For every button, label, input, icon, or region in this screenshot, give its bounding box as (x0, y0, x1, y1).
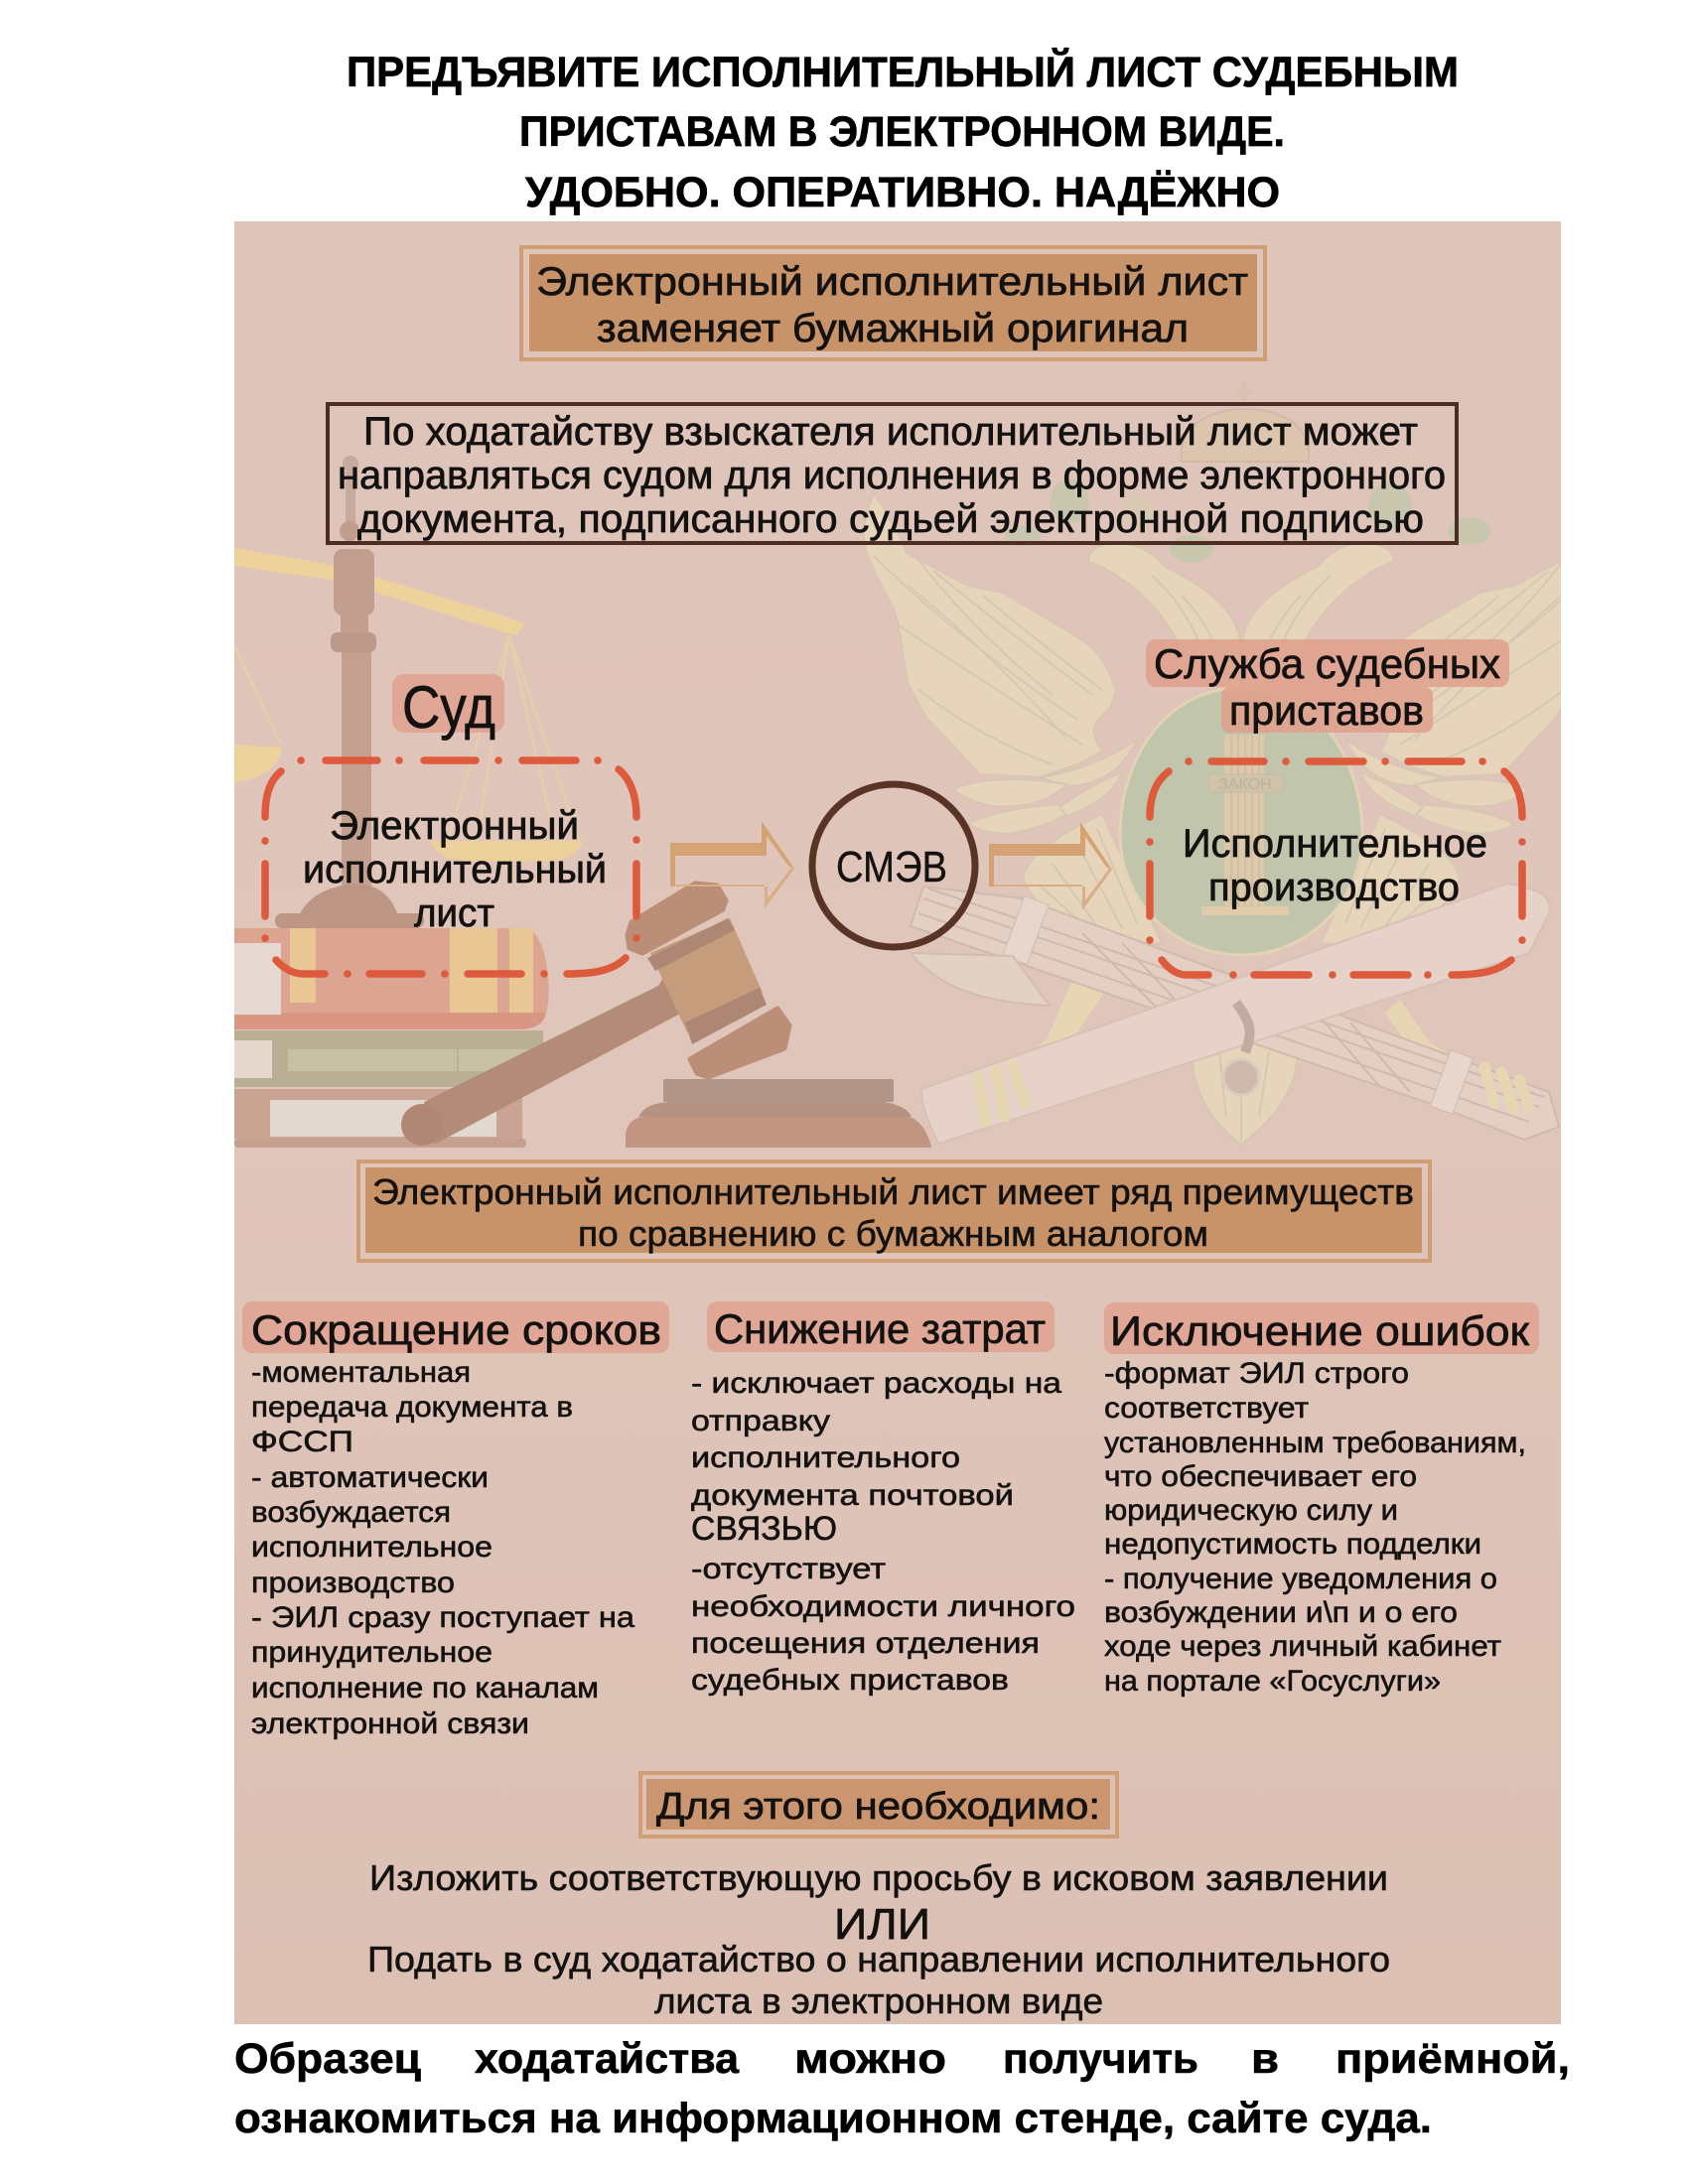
dashed box: electronic writ: Электронный (330, 804, 579, 848)
column: exclusion of errors: -формат ЭИЛ строго (1104, 1357, 1409, 1390)
text block: how to request: ИЛИ (834, 1900, 930, 1949)
arrow: SMEV to bailiff service (989, 822, 1112, 910)
illustration: eagle emblem: ЗАКОН (1218, 776, 1272, 793)
column: reduced terms: электронной связи (251, 1707, 529, 1740)
column: reduced costs: -отсутствует (691, 1553, 886, 1585)
text block: how to request: листа в электронном виде (654, 1980, 1103, 2021)
banner: advantages (358, 1161, 1430, 1261)
column: reduced terms: производство (251, 1567, 455, 1599)
text box: petition of the claimant: По ходатайству взыскателя исполнительный лист может (363, 410, 1418, 454)
dashed box: electronic writ: лист (414, 891, 494, 935)
footer note: получить (1003, 2035, 1198, 2083)
right half of eagle (1243, 545, 1561, 943)
text box: petition of the claimant: документа, подписанного судьей электронной подписью (357, 497, 1424, 541)
label: bailiff service: приставов (1229, 687, 1424, 734)
column: exclusion of errors: Исключение ошибок (1110, 1307, 1530, 1354)
column: exclusion of errors: возбуждении и\п и о его (1104, 1596, 1458, 1629)
column: reduced terms: - ЭИЛ сразу поступает на (251, 1601, 634, 1634)
illustration: gavel (401, 884, 931, 1148)
footer note: ходатайства (475, 2035, 740, 2083)
illustration: scales of justice (234, 456, 583, 928)
column: exclusion of errors: юридическую силу и (1104, 1494, 1398, 1527)
label: bailiff service (1146, 639, 1509, 734)
crowns and orbs (1236, 382, 1252, 407)
text box: petition of the claimant: направляться судом для исполнения в форме электронного (338, 454, 1446, 497)
banner: advantages: по сравнению с бумажным аналогом (578, 1213, 1208, 1254)
column: exclusion of errors: установленным требованиям, (1104, 1427, 1526, 1459)
column (1224, 735, 1264, 908)
column: reduced costs: СВЯЗЬЮ (691, 1510, 837, 1548)
ribbon and medal (1236, 1003, 1250, 1052)
illustration: eagle emblem (864, 382, 1618, 1145)
column: exclusion of errors: недопустимость подделки (1104, 1528, 1481, 1561)
column: reduced terms: передача документа в (251, 1391, 573, 1424)
column: reduced costs: документа почтовой (691, 1479, 1014, 1512)
text box: petition of the claimant (328, 404, 1457, 543)
banner: replaces paper original: Электронный исполнительный лист (536, 260, 1248, 304)
title: ПРИСТАВАМ В ЭЛЕКТРОННОМ ВИДЕ. (519, 108, 1285, 156)
left half of eagle (864, 493, 1241, 948)
illustration: stack of books (234, 928, 549, 1148)
fasces (911, 887, 1559, 1140)
column: reduced terms (242, 1301, 669, 1740)
column: reduced costs (691, 1301, 1075, 1697)
column: reduced costs: отправку (691, 1405, 830, 1437)
label: court: Суд (402, 674, 495, 741)
shield (1120, 688, 1362, 955)
circle: SMEV (812, 784, 975, 947)
title (347, 48, 1459, 216)
axe blade (911, 953, 1050, 1006)
column: reduced terms: возбуждается (251, 1496, 451, 1529)
dashed box: enforcement proceedings: производство (1208, 866, 1460, 909)
column: exclusion of errors: соответствует (1104, 1392, 1309, 1425)
column: reduced costs: Снижение затрат (714, 1305, 1046, 1352)
text block: how to request (367, 1857, 1390, 2021)
dashed box: enforcement proceedings (1150, 761, 1522, 975)
column: reduced costs: необходимости личного (691, 1590, 1075, 1623)
banner: what is required: Для этого необходимо: (656, 1786, 1100, 1828)
column: exclusion of errors (1104, 1302, 1539, 1698)
claws (978, 1064, 1529, 1122)
title: ПРЕДЪЯВИТЕ ИСПОЛНИТЕЛЬНЫЙ ЛИСТ СУДЕБНЫМ (347, 48, 1459, 96)
banner: what is required (640, 1773, 1117, 1837)
column: reduced costs: судебных приставов (691, 1664, 1009, 1697)
banner: advantages: Электронный исполнительный лист имеет ряд преимуществ (372, 1171, 1414, 1212)
tail and medal (1194, 1044, 1297, 1144)
column: reduced costs: - исключает расходы на (691, 1367, 1061, 1400)
legs (1039, 983, 1104, 1046)
column: reduced terms: -моментальная (251, 1356, 471, 1389)
column: exclusion of errors: ходе через личный кабинет (1104, 1630, 1501, 1663)
dashed box: electronic writ (265, 760, 636, 974)
dashed box: electronic writ: исполнительный (303, 848, 607, 891)
text block: how to request: Изложить соответствующую просьбу в исковом заявлении (369, 1857, 1388, 1898)
column: exclusion of errors: - получение уведомления о (1104, 1563, 1497, 1595)
arrow: court to SMEV (670, 821, 794, 908)
footer note: Образец (234, 2035, 422, 2083)
column: exclusion of errors: на портале «Госуслуги» (1104, 1665, 1441, 1698)
footer note: в (1251, 2035, 1279, 2083)
column: reduced terms: исполнительное (251, 1531, 492, 1564)
column: exclusion of errors: что обеспечивает его (1104, 1460, 1417, 1493)
column: reduced costs: исполнительного (691, 1441, 960, 1474)
banner: replaces paper original (521, 247, 1265, 359)
label: bailiff service: Служба судебных (1154, 640, 1500, 687)
column: reduced terms: - автоматически (251, 1461, 489, 1494)
sword (921, 884, 1550, 1144)
column: reduced costs: посещения отделения (691, 1627, 1040, 1660)
text block: how to request: Подать в суд ходатайство о направлении исполнительного (367, 1939, 1390, 1979)
footer note (234, 2035, 1570, 2142)
circle: SMEV: СМЭВ (836, 843, 947, 891)
column: reduced terms: принудительное (251, 1636, 492, 1669)
column: reduced terms: исполнение по каналам (251, 1672, 599, 1705)
column: reduced terms: Сокращение сроков (251, 1306, 661, 1353)
panel: background (234, 221, 1561, 2024)
dashed box: enforcement proceedings: Исполнительное (1183, 822, 1487, 866)
footer note: можно (794, 2035, 946, 2083)
column: reduced terms: ФССП (251, 1426, 353, 1458)
footer note: приёмной, (1336, 2035, 1570, 2083)
title: УДОБНО. ОПЕРАТИВНО. НАДЁЖНО (525, 169, 1280, 216)
banner: replaces paper original: заменяет бумажный оригинал (597, 307, 1189, 350)
footer note: ознакомиться на информационном стенде, сайте суда. (234, 2095, 1432, 2142)
